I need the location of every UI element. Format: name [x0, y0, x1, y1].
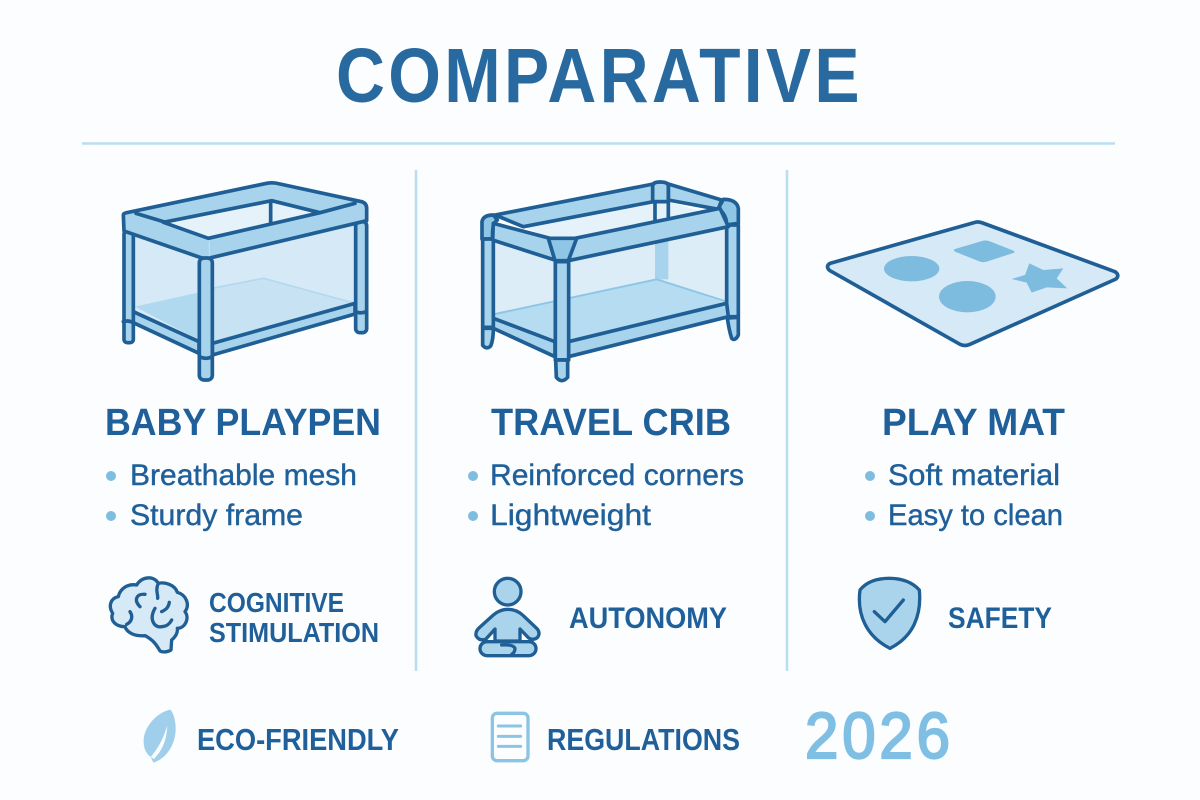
- illustration: play mat: [827, 222, 1118, 345]
- label: cognitive stimulation: STIMULATION: [209, 617, 379, 648]
- icon: seated person: [476, 578, 539, 656]
- illustration: travel crib: [482, 182, 738, 381]
- icon: leaf: [144, 710, 176, 763]
- feature list: baby playpen: Sturdy frame: [130, 499, 303, 532]
- label: safety: SAFETY: [948, 602, 1052, 635]
- heading: play mat: PLAY MAT: [882, 402, 1065, 444]
- label: cognitive stimulation: COGNITIVE: [209, 587, 344, 618]
- feature list: play mat: [865, 459, 1063, 532]
- feature list: travel crib: [468, 459, 744, 532]
- feature list: travel crib: Lightweight: [490, 499, 651, 532]
- panel: play mat: [827, 222, 1118, 648]
- footer: [144, 700, 950, 773]
- title: COMPARATIVE: [336, 33, 860, 119]
- feature list: play mat: Easy to clean: [888, 499, 1063, 532]
- illustration: baby playpen: [123, 183, 367, 380]
- feature list: baby playpen: [106, 459, 357, 532]
- icon: document: [492, 713, 528, 761]
- icon: shield: [859, 578, 920, 648]
- icon: brain: [110, 578, 187, 652]
- label: autonomy: AUTONOMY: [569, 602, 727, 635]
- panel: travel crib: [468, 182, 744, 656]
- feature list: play mat: Soft material: [888, 459, 1060, 492]
- feature list: baby playpen: Breathable mesh: [130, 459, 357, 492]
- label: cognitive stimulation: [209, 587, 379, 648]
- panel: baby playpen: [105, 183, 381, 652]
- heading: baby playpen: BABY PLAYPEN: [105, 402, 381, 444]
- label: eco-friendly: ECO-FRIENDLY: [197, 722, 399, 757]
- label: regulations: REGULATIONS: [547, 722, 740, 757]
- heading: travel crib: TRAVEL CRIB: [491, 402, 731, 444]
- year: 2026: [805, 700, 950, 773]
- feature list: travel crib: Reinforced corners: [490, 459, 744, 492]
